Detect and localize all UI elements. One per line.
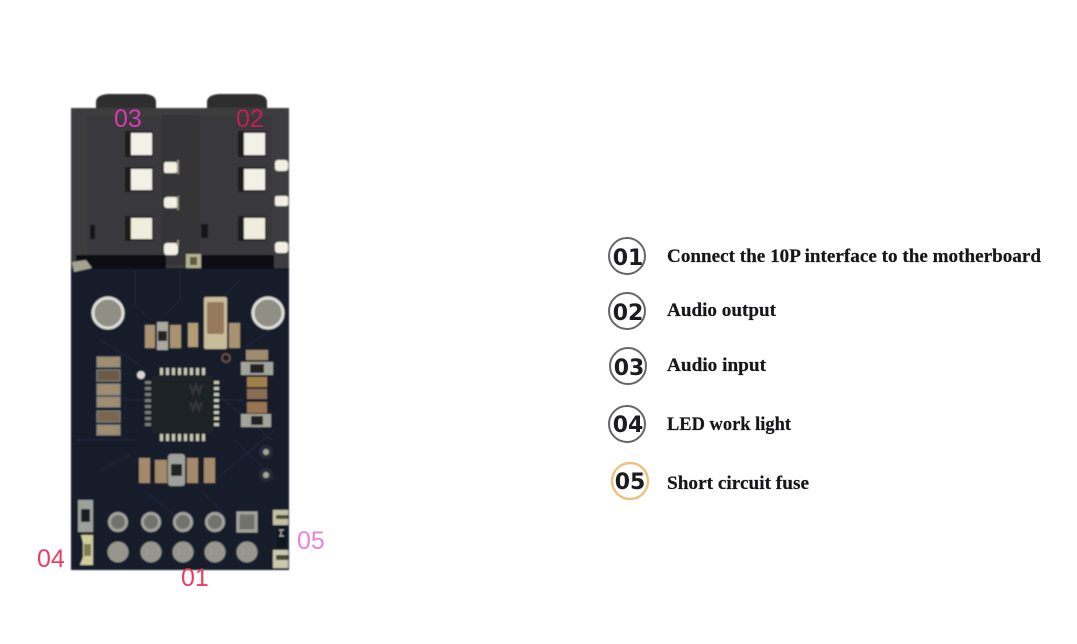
board label 05: 05: [297, 527, 325, 555]
legend item 03: Audio input: [667, 355, 767, 376]
legend item 02: [609, 293, 777, 329]
PCB lower navy body: [71, 262, 289, 570]
legend item 04: 04: [613, 413, 643, 438]
connector area base: [71, 108, 289, 268]
circuit board photo: [71, 94, 289, 570]
legend item 05: 05: [615, 470, 645, 495]
legend item 01: 01: [613, 246, 643, 271]
legend item 02: Audio output: [667, 300, 777, 321]
legend item 02: 02: [613, 301, 643, 326]
vias: [259, 445, 273, 482]
legend item 01: [609, 238, 1041, 274]
mounting holes: [93, 298, 283, 328]
upper capacitors: [145, 297, 240, 362]
legend item 01: Connect the 10P interface to the motherboard: [667, 246, 1041, 267]
short circuit fuse: [273, 510, 288, 568]
processor chip: [137, 368, 219, 441]
10P interface pads: [109, 513, 256, 561]
left capacitor stack: [97, 357, 120, 435]
right capacitor stack: [241, 350, 273, 427]
legend item 04: LED work light: [667, 414, 792, 435]
lower capacitors: [139, 454, 215, 486]
solder pads beside jacks: [72, 160, 288, 272]
jack: audio output: [196, 94, 274, 269]
legend item 03: 03: [614, 356, 644, 381]
board label 02: 02: [236, 105, 264, 133]
legend item 04: [609, 406, 792, 442]
board label 01: 01: [181, 564, 209, 592]
board label 03: 03: [114, 105, 142, 133]
legend item 05: Short circuit fuse: [667, 473, 809, 494]
PCB traces: [76, 270, 275, 520]
jack: audio input: [76, 94, 166, 269]
legend item 05: [612, 463, 809, 499]
legend item 03: [610, 348, 767, 384]
LED work light: [78, 500, 93, 565]
board label 04: 04: [37, 545, 65, 573]
